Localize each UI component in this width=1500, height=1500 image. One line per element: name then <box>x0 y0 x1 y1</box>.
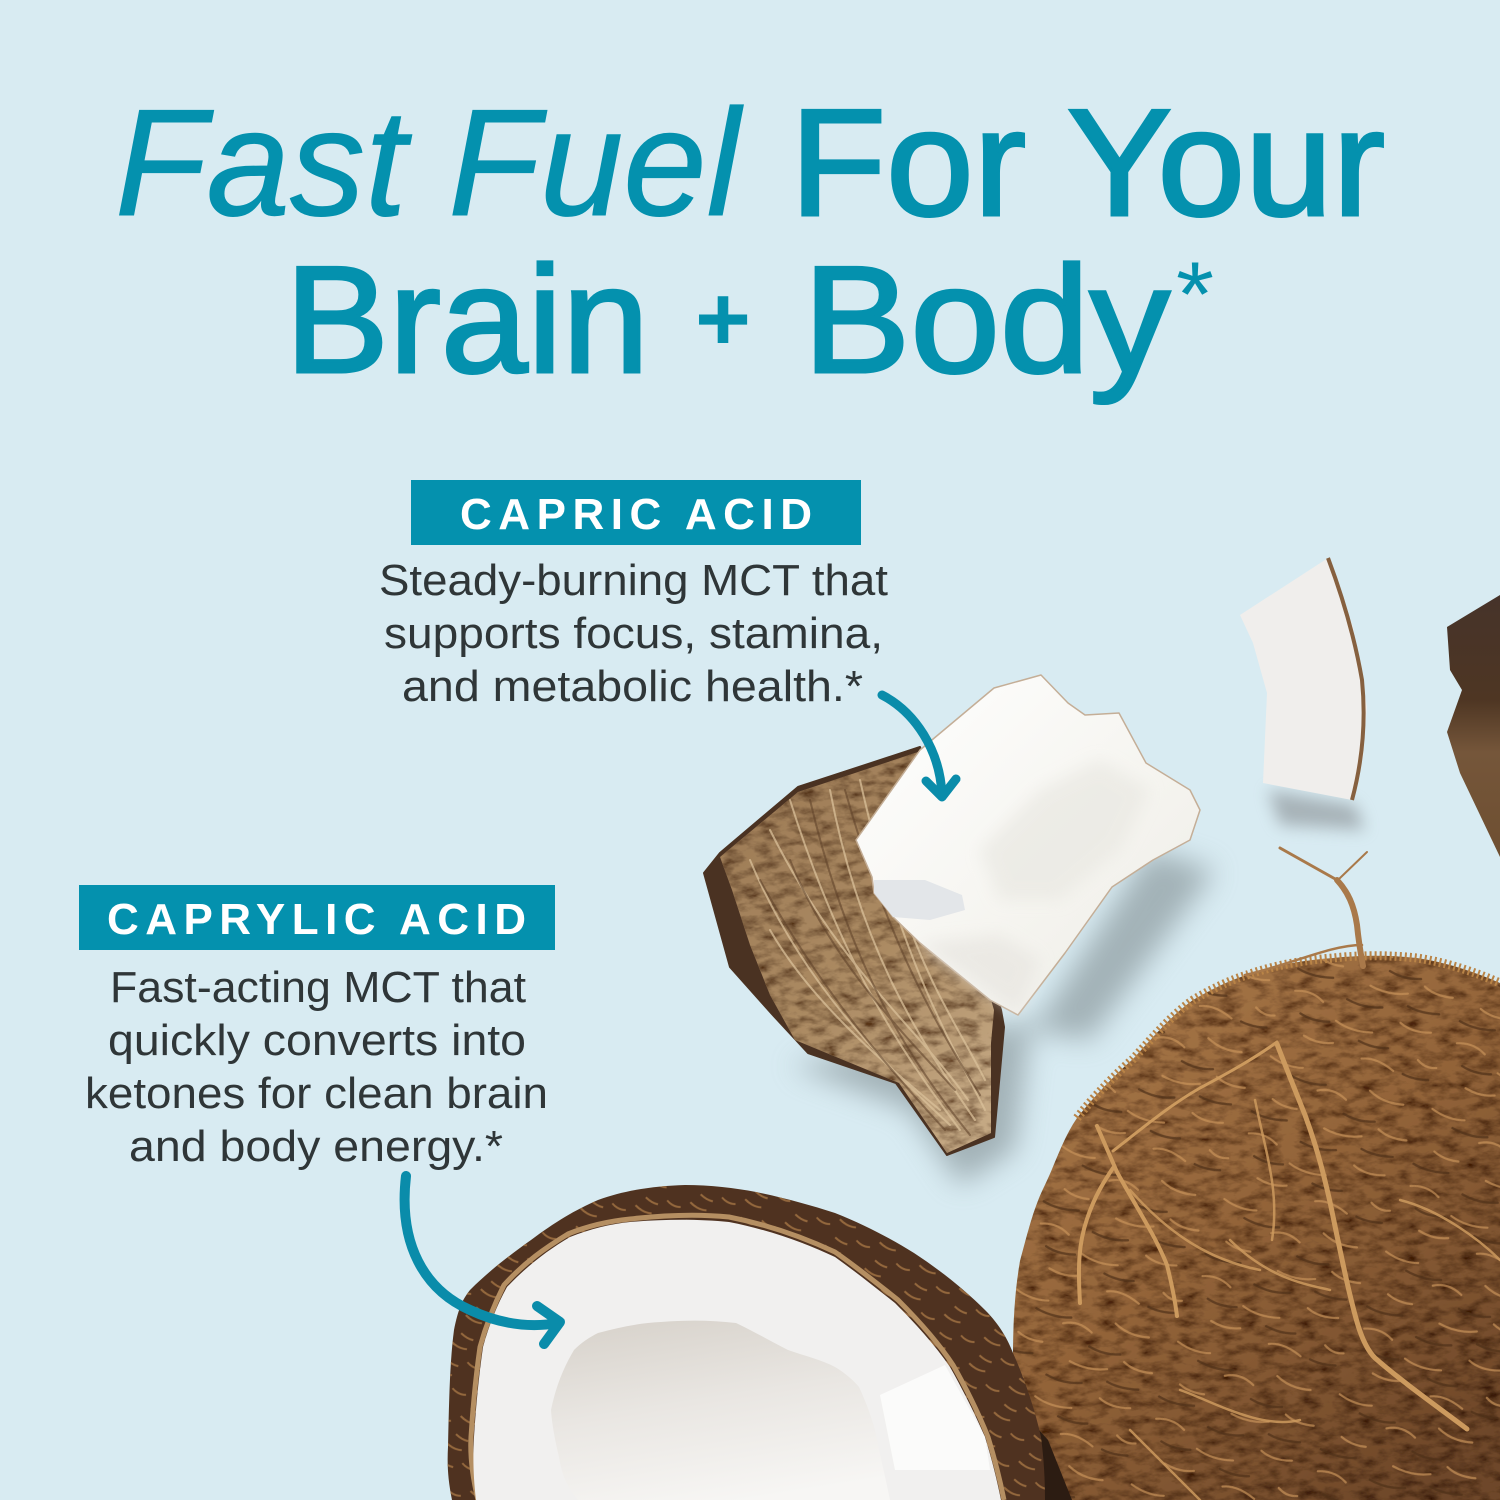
capric acid label: CAPRIC ACID <box>460 490 812 539</box>
long fibres <box>1079 1042 1500 1500</box>
crevice between coconuts <box>1030 1420 1072 1500</box>
coconut stem fibre <box>1245 848 1367 975</box>
caprylic acid label: CAPRYLIC ACID <box>107 895 526 944</box>
cast shadows <box>790 850 1215 1185</box>
caprylic acid description <box>85 963 548 1171</box>
caprylic acid description: Fast-acting MCT that <box>110 963 526 1012</box>
halved coconut <box>448 1185 1072 1500</box>
title: * <box>1176 244 1214 346</box>
title: Brain <box>285 235 649 405</box>
shell piece <box>704 747 1004 1155</box>
flesh shading <box>880 1365 990 1470</box>
title: Body <box>803 235 1170 405</box>
flesh chunk <box>856 675 1200 1015</box>
arrow to flesh chunk <box>882 695 956 797</box>
right shell fragment <box>1447 595 1500 857</box>
capric acid description <box>379 556 888 711</box>
title: Fast Fuel <box>115 78 744 248</box>
shell fibres <box>750 780 985 1135</box>
flesh shading <box>980 760 1150 900</box>
capric acid description: and metabolic health.* <box>402 662 863 711</box>
caprylic acid description: quickly converts into <box>108 1016 526 1065</box>
fuzzy top edge <box>1077 956 1500 1118</box>
inner bowl <box>551 1321 890 1500</box>
husk <box>448 1185 1045 1500</box>
capric acid label <box>411 480 861 545</box>
arrow to halved coconut <box>405 1176 560 1344</box>
caprylic acid label <box>79 885 555 950</box>
title: For Your <box>790 78 1385 248</box>
large coconut <box>1013 848 1500 1500</box>
title: + <box>695 268 751 370</box>
title <box>115 78 1385 405</box>
white flesh <box>473 1220 1001 1500</box>
caprylic acid description: ketones for clean brain <box>85 1069 548 1118</box>
capric acid description: Steady-burning MCT that <box>379 556 888 605</box>
tan rim <box>471 1215 1004 1500</box>
small coconut flesh piece <box>1240 558 1367 830</box>
caprylic acid description: and body energy.* <box>129 1122 503 1171</box>
coconut shell fragment with flesh chunk <box>704 675 1215 1185</box>
capric acid description: supports focus, stamina, <box>384 609 883 658</box>
